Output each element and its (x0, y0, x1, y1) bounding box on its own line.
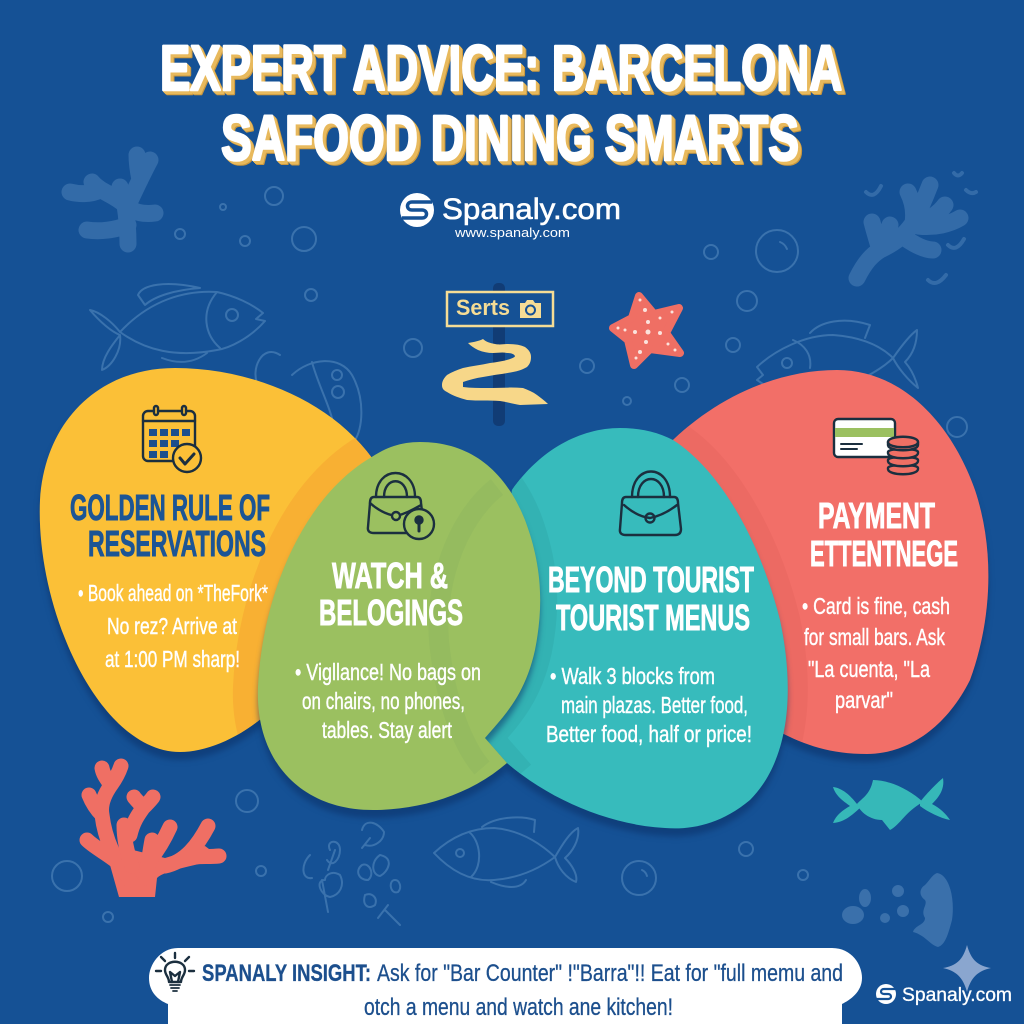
background fish outline left (90, 284, 265, 370)
callout: Spanaly insight: otch a menu and watch ane kitchen! (364, 994, 673, 1021)
background fish outline bottom (434, 817, 578, 887)
panel: teal menus (485, 428, 792, 838)
heading: beyond tourist menus: BEYOND TOURIST (548, 559, 754, 600)
text: payment body: • Card is fine, cash (802, 593, 950, 619)
text: payment body (802, 593, 950, 713)
icon: light bulb (156, 953, 194, 991)
background fish outline behind yellow panel (255, 352, 361, 440)
heading: watch and belongings: BELOGINGS (319, 592, 463, 633)
icon: calendar (143, 406, 201, 472)
text: payment body: parvar" (835, 687, 893, 713)
text: belongings body: • Vigllance! No bags on (295, 659, 481, 685)
background seaweed scribbles (303, 823, 400, 925)
heading: payment: PAYMENT (818, 495, 935, 536)
background coral top left (70, 155, 155, 244)
text: payment body: for small bars. Ask (804, 624, 945, 650)
background coral top right (857, 173, 976, 283)
text: menus body: Better food, half or price! (546, 721, 752, 747)
icon: card and coins (834, 419, 918, 474)
background fish outline right (757, 321, 918, 392)
text: belongings body (295, 659, 481, 743)
text: reservations body: • Book ahead on *TheFork* (78, 580, 268, 606)
title (160, 32, 842, 174)
background seaweed bottom right (842, 873, 953, 947)
heading: beyond tourist menus (548, 559, 754, 638)
text: belongings body: on chairs, no phones, (302, 688, 465, 714)
text: payment body: "La cuenta, "La (808, 656, 930, 682)
text: menus body: main plazas. Better food, (561, 692, 748, 718)
sparkle star (943, 945, 991, 992)
icon: handbag with lock (368, 473, 434, 539)
text: menus body (546, 663, 752, 747)
heading: golden rule (70, 487, 270, 564)
text: menus body: • Walk 3 blocks from (550, 663, 715, 689)
text: reservations body: at 1:00 PM sharp! (105, 646, 240, 672)
heading: watch and belongings (319, 555, 463, 633)
heading: golden rule: RESERVATIONS (88, 523, 266, 564)
heading: golden rule: GOLDEN RULE OF (70, 487, 270, 528)
callout: Spanaly insight: Ask for "Bar Counter" !"Barra"!! Eat for "full memu and (377, 960, 843, 987)
panel: green belongings (258, 442, 540, 810)
logo (400, 193, 621, 240)
panel: yellow reservations (38, 368, 372, 762)
signpost with ribbon: Serts (456, 295, 510, 320)
heading: payment (810, 495, 958, 574)
logo: www.spanaly.com (454, 225, 570, 240)
signpost with ribbon (442, 283, 553, 426)
text: belongings body: tables. Stay alert (322, 717, 452, 743)
callout: Spanaly insight: SPANALY INSIGHT: (202, 960, 371, 987)
heading: beyond tourist menus: TOURIST MENUS (556, 597, 750, 638)
logo: Spanaly.com (442, 193, 621, 226)
heading: watch and belongings: WATCH & (332, 555, 448, 596)
starfish (613, 296, 680, 365)
background decorations: bubbles (52, 187, 967, 922)
logo bottom right: Spanaly.com (902, 985, 1012, 1006)
title: SAFOOD DINING SMARTS (221, 102, 799, 174)
panels group (40, 368, 988, 828)
panel: coral payment (673, 370, 990, 764)
callout: Spanaly insight (149, 948, 862, 1024)
icon: coral (87, 766, 221, 897)
text: reservations body: No rez? Arrive at (107, 613, 237, 639)
icon: teal fish (833, 778, 950, 830)
icon: handbag (620, 472, 681, 535)
text: reservations body (78, 580, 268, 672)
